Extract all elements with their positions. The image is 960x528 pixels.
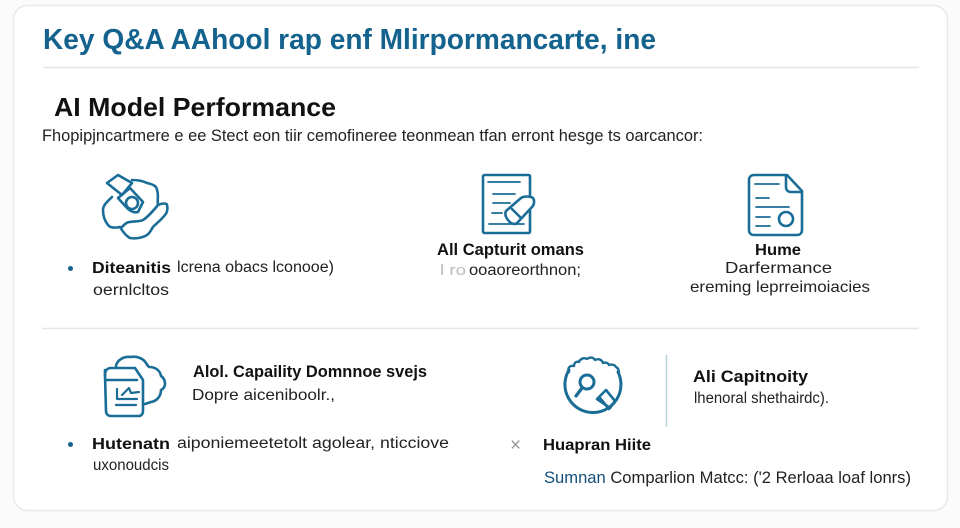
column 2 text: All Capturit omans [437,240,584,259]
block 4 heading [192,362,427,404]
icon: cloud with document [105,357,165,416]
bullet 4 [68,435,449,474]
section heading: AI Model Performance [54,92,336,122]
intro text: Fhopipjncartmere e ee Stect eon tiir cemofineree teonmean tfan erront hesge ts oarcancor: [42,127,703,145]
bullet 5 title: Huapran Hiite [543,437,651,454]
column 3 text: Darfermance [725,260,832,277]
block 5 heading [693,367,829,407]
block 4 heading: Alol. Capaility Domnnoe svejs [193,362,427,381]
column 2 text: ooaoreorthnon; [469,262,581,279]
bullet 1: Diteanitis [92,260,171,277]
icon: document with pen [483,175,534,233]
bullet 5 marker: × [510,435,521,456]
column 3 text [690,242,870,296]
bullet 4: aiponiemeetetolt agolear, nticciove [177,435,449,452]
bullet 4: Hutenatn [92,436,170,453]
block 5 heading: Ali Capitnoity [693,367,809,386]
icon: circle with magnifier [565,358,621,413]
block 4 heading: Dopre aiceniboolr., [192,387,335,404]
column 2 text: l ro [440,262,466,279]
icon: cloud hand with device [103,175,167,238]
block 5 heading: lhenoral shethairdc). [694,390,829,407]
icon: document with seal [749,175,802,235]
bullet 1 [68,259,334,299]
title: Key Q&A AAhool rap enf Mlirpormancarte, ine [43,24,656,56]
comparison note: Sumnan Comparlion Matcc: ('2 Rerloaa loaf lonrs) [544,469,911,487]
column 2 text [437,240,584,279]
bullet 1: lcrena obacs lconooe) [177,259,334,276]
bullet 1: oernlcltos [93,282,169,299]
column 3 text: Hume [755,242,801,259]
column 3 text: ereming leprreimoiacies [690,279,870,296]
bullet 4: uxonoudcis [93,457,169,474]
